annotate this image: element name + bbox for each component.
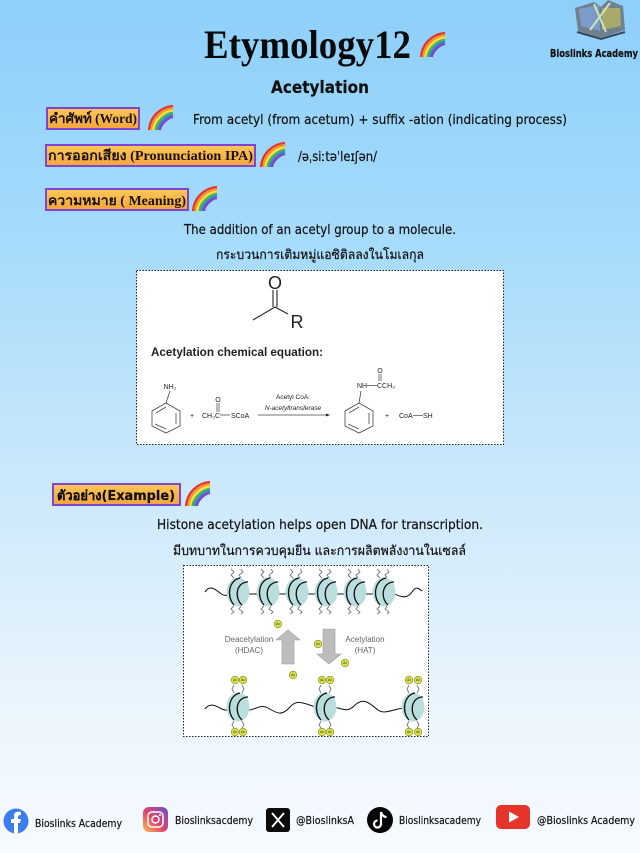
reaction scheme: CH₃C: [202, 413, 220, 420]
facebook handle: Bioslinks Academy: [35, 818, 122, 830]
instagram handle: Bioslinksacdemy: [175, 815, 253, 827]
free acetyl groups: [274, 620, 349, 679]
icon: meaning rainbow: [193, 187, 217, 211]
reaction scheme: [152, 368, 433, 433]
reaction scheme: NH: [357, 383, 367, 390]
example English: Histone acetylation helps open DNA for transcription.: [157, 518, 483, 533]
arrow: down: [317, 629, 341, 664]
label: meaning: ความหมาย ( Meaning): [48, 193, 186, 208]
arrow: up: [276, 630, 300, 664]
reaction scheme: +: [190, 413, 194, 420]
icon: title rainbow: [421, 33, 445, 57]
label: meaning: [46, 189, 188, 210]
acetyl group structure: [253, 273, 304, 332]
panel: acetylation chemistry image: [136, 270, 504, 444]
icon: word rainbow: [149, 106, 173, 130]
acetyl group structure: R: [290, 312, 304, 332]
logo: open book: [575, 0, 625, 39]
reaction scheme: SCoA: [231, 413, 250, 420]
reaction scheme: O: [377, 368, 383, 375]
reaction scheme: O: [215, 397, 221, 404]
reaction scheme: CoA: [399, 413, 413, 420]
acetyl group structure: O: [268, 273, 282, 293]
panel: histone acetylation diagram: (HDAC): [235, 646, 263, 655]
reaction scheme: N-acetyltransferase: [265, 405, 322, 412]
chemical equation heading: Acetylation chemical equation:: [151, 347, 323, 359]
icon: X: [266, 808, 290, 832]
condensed chromatin: [205, 569, 422, 614]
panel: histone acetylation diagram: (HAT): [355, 646, 376, 655]
panel: histone acetylation diagram: [184, 566, 428, 736]
title: Etymology12: [204, 22, 411, 67]
icon: example rainbow: [186, 482, 210, 506]
icon: instagram: [143, 807, 168, 832]
reaction scheme: CCH₃: [377, 383, 395, 390]
icon: youtube: [496, 805, 530, 829]
meaning English: The addition of an acetyl group to a molecule.: [183, 223, 456, 238]
deacetylation label: Deacetylation: [225, 635, 273, 644]
tiktok handle: Bioslinksacademy: [399, 815, 481, 827]
label: pronunciation: [46, 145, 255, 166]
meaning Thai: กระบวนการเติมหมู่แอซิติลลงในโมเลกุล: [216, 247, 424, 263]
icon: pronunciation rainbow: [261, 143, 285, 167]
label: example: ตัวอย่าง(Example): [57, 488, 175, 504]
icon: tiktok: [367, 807, 393, 833]
label: pronunciation: การออกเสียง (Pronunciation IPA): [48, 148, 253, 163]
icon: facebook: [4, 808, 28, 834]
label: word: [47, 108, 139, 129]
reaction scheme: NH₂: [164, 384, 177, 391]
example Thai: มีบทบาทในการควบคุมยีน และการผลิตพลังงานในเซลล์: [173, 543, 466, 559]
reaction scheme: Acetyl CoA:: [276, 394, 310, 401]
reaction scheme: +: [385, 413, 389, 420]
label: word: คำศัพท์ (Word): [49, 110, 137, 126]
reaction scheme: SH: [423, 413, 433, 420]
word origin text: From acetyl (from acetum) + suffix -ation (indicating process): [193, 112, 567, 128]
IPA text: /əˌsiːtəˈleɪʃən/: [298, 150, 378, 165]
acetylation label: Acetylation: [345, 635, 385, 644]
open chromatin: [205, 676, 424, 736]
subtitle: Acetylation: [271, 78, 369, 98]
X handle: @BioslinksA: [296, 815, 355, 827]
